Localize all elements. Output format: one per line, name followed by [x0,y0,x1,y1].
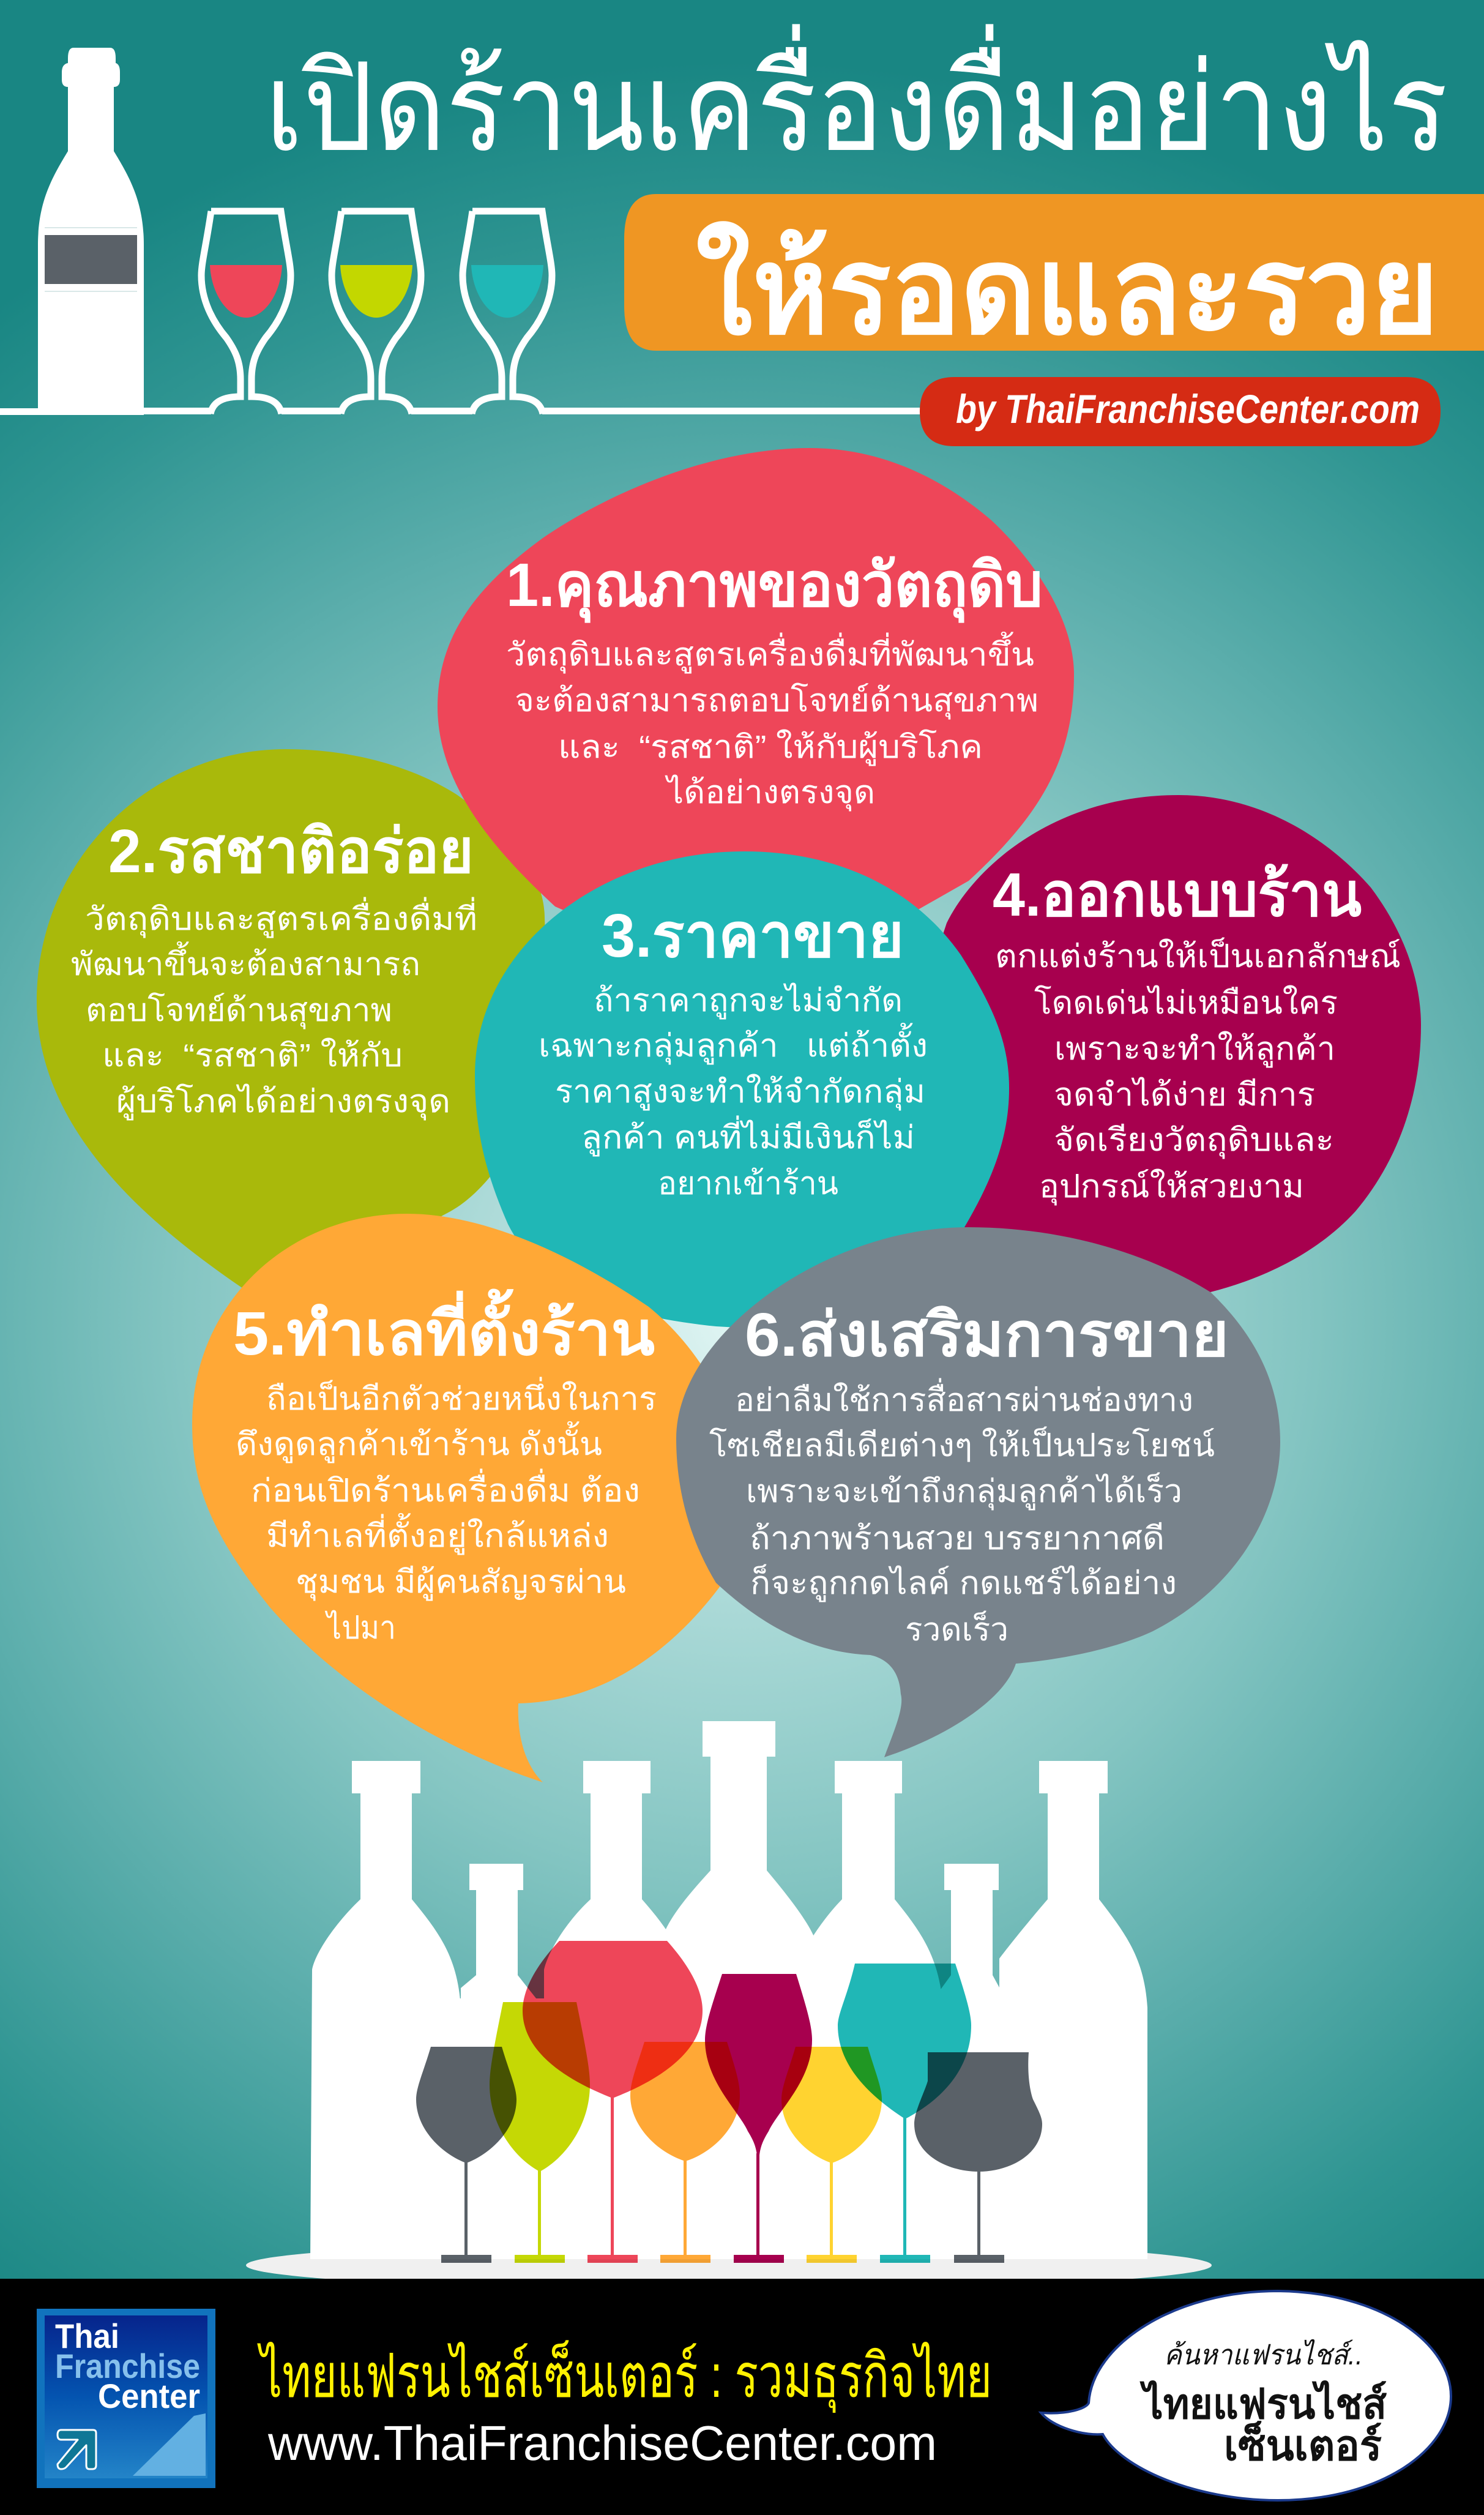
text block 5: มีทำเลที่ตั้งอยู่ใกล้แหล่ง [266,1513,609,1555]
icon: logo arrow [58,2430,96,2469]
text block 5 [236,1377,657,1646]
text block 6: อย่าลืมใช้การสื่อสารผ่านช่องทาง [735,1378,1193,1418]
text block 4: ตกแต่งร้านให้เป็นเอกลักษณ์ [995,938,1401,974]
text block 3: เฉพาะกลุ่มลูกค้า แต่ถ้าตั้ง [539,1023,928,1065]
text block 1 [506,632,1038,812]
text block 2: ผู้บริโภคได้อย่างตรงจุด [116,1083,450,1121]
text block 5: ไปมา [324,1610,396,1646]
text block 6 [709,1378,1215,1648]
subtitle text: ให้รอดและรวย [696,220,1439,359]
text block 4: จดจำได้ง่าย มีการ [1054,1077,1315,1113]
heading 6: 6.ส่งเสริมการขาย [745,1301,1229,1369]
text block 6: ก็จะถูกกดไลค์ กดแชร์ได้อย่าง [750,1564,1177,1602]
icon: dark glass left [416,2047,516,2263]
text block 2: พัฒนาขึ้นจะต้องสามารถ [71,941,420,982]
icon: yellow glass [781,2047,882,2263]
text block 3: ลูกค้า คนที่ไม่มีเงินก็ไม่ [581,1115,915,1157]
bubble 3: price [475,851,1009,1334]
speech text bold line two: เซ็นเตอร์ [1224,2421,1382,2469]
heading 5: 5.ทำเลที่ตั้งร้าน [233,1288,655,1368]
white bottles [310,1721,1147,2259]
icon: dark glass right [914,2052,1042,2263]
text block 2: วัตถุดิบและสูตรเครื่องดื่มที่ [85,897,477,938]
subtitle banner [624,194,1484,359]
bubble 2: taste [37,749,551,1316]
text block 2: ตอบโจทย์ด้านสุขภาพ [86,992,392,1030]
logo [37,2309,215,2488]
text block 3 [539,982,928,1201]
heading 3: 3.ราคาขาย [602,902,904,970]
icon: glass with red drink [201,211,291,414]
text block 6: โซเชียลมีเดียต่างๆ ให้เป็นประโยชน์ [709,1427,1215,1463]
speech bubble [1041,2291,1451,2500]
footer bar [0,2279,1484,2515]
text block 5: ถือเป็นอีกตัวช่วยหนึ่งในการ [266,1377,657,1417]
icon: glass with lime drink [332,211,421,414]
coloured glasses [416,1941,1042,2263]
text block 1: และ “รสชาติ” ให้กับผู้บริโภค [558,729,983,766]
text block 1: ได้อย่างตรงจุด [665,774,875,812]
text block 6: เพราะจะเข้าถึงกลุ่มลูกค้าได้เร็ว [746,1473,1182,1511]
heading 4: 4.ออกแบบร้าน [993,861,1362,929]
text block 2 [71,897,477,1121]
text block 5: ดึงดูดลูกค้าเข้าร้าน ดังนั้น [236,1421,602,1463]
text block 3: ราคาสูงจะทำให้จำกัดกลุ่ม [555,1074,925,1111]
logo text [55,2317,200,2415]
icon: glass with teal drink [463,211,552,414]
speech text bold: ไทยแฟรนไชส์ [1139,2380,1387,2427]
footer Thai tagline: ไทยแฟรนไชส์เซ็นเตอร์ : รวมธุรกิจไทย [257,2339,992,2413]
text block 5: ชุมชน มีผู้คนสัญจรผ่าน [296,1564,626,1601]
bubble 4: shop design [887,795,1421,1316]
text block 1: วัตถุดิบและสูตรเครื่องดื่มที่พัฒนาขึ้น [506,632,1034,674]
logo text: Thai [55,2317,119,2355]
text block 4: เพราะจะทำให้ลูกค้า [1054,1031,1335,1068]
text block 1: จะต้องสามารถตอบโจทย์ด้านสุขภาพ [515,682,1038,720]
bubble 5: location [192,1214,740,1782]
bubble 6: promotion [676,1227,1280,1757]
icon: wine bottle [38,48,144,415]
icon: orange glass [630,2042,740,2263]
text block 3: อยากเข้าร้าน [658,1166,838,1201]
text block 5: ก่อนเปิดร้านเครื่องดื่ม ต้อง [251,1468,640,1509]
footer url: www.ThaiFranchiseCenter.com [267,2416,937,2470]
header illustration: bottle and glasses [0,48,922,415]
heading 1: 1.คุณภาพของวัตถุดิบ [506,551,1043,623]
logo text: Center [98,2377,200,2415]
text block 6: ถ้าภาพร้านสวย บรรยากาศดี [750,1521,1165,1556]
icon: magenta glass [705,1974,812,2263]
text block 3: ถ้าราคาถูกจะไม่จำกัด [594,982,903,1020]
text block 2: และ “รสชาติ” ให้กับ [102,1037,403,1074]
speech text small: ค้นหาแฟรนไชส์.. [1164,2339,1363,2371]
text block 4: จัดเรียงวัตถุดิบและ [1054,1123,1334,1159]
byline pill [920,377,1441,446]
text block 6: รวดเร็ว [905,1611,1009,1648]
heading 2: 2.รสชาติอร่อย [108,817,474,886]
icon: lime glass [490,2002,590,2263]
logo text: Franchise [55,2347,200,2385]
bubble 1: ingredient quality [438,448,1074,979]
text block 4: อุปกรณ์ให้สวยงาม [1039,1168,1304,1206]
text on bubble 2 [71,817,477,1121]
tray [246,2241,1212,2290]
icon: teal glass [838,1964,971,2263]
text block 4: โดดเด่นไม่เหมือนใคร [1034,985,1338,1021]
table line [0,408,922,415]
text block 4 [995,938,1401,1206]
icon: red glass [523,1941,703,2263]
